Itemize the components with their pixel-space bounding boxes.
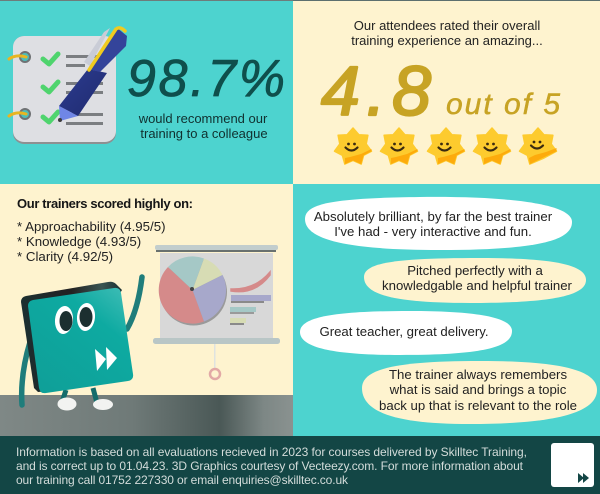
quote bubble 1 <box>305 197 572 250</box>
text: footer note: our training call 01752 227330 or email enquiries@skilltec.co.uk <box>16 473 349 487</box>
quote bubble 1: Absolutely brilliant, by far the best trainer <box>314 209 553 224</box>
panel: testimonials <box>293 184 600 436</box>
panel: trainer scores <box>0 184 293 436</box>
quote bubble 3 <box>300 311 512 355</box>
text: footer note: Information is based on all evaluations recieved in 2023 for courses delivered by Skilltec Training, <box>16 445 527 459</box>
icon: five smiling stars <box>334 128 556 164</box>
text: recommend caption: would recommend our <box>138 111 268 126</box>
quote bubble 1: I've had - very interactive and fun. <box>334 224 532 239</box>
text: out of 5: out of 5 <box>446 88 560 121</box>
logo: Skilltec fast-forward tile <box>551 443 594 487</box>
quote bubble 4 <box>362 361 597 424</box>
quote bubble 3: Great teacher, great delivery. <box>319 324 489 339</box>
panel: recommendation <box>0 0 293 184</box>
illustration: mascot character <box>21 277 142 410</box>
ground <box>0 395 293 436</box>
quote bubble 4: The trainer always remembers <box>389 367 567 382</box>
text: rating intro: Our attendees rated their overall <box>354 18 540 33</box>
stat: 4.8: 4.8 <box>321 52 431 130</box>
text: rating intro: training experience an amazing... <box>351 33 543 48</box>
pie chart <box>159 256 227 326</box>
quote bubble 4: back up that is relevant to the role <box>379 398 577 413</box>
quote bubble 2 <box>364 258 586 303</box>
stat: 98.7%: 98.7% <box>127 50 285 108</box>
text: recommend caption: training to a colleague <box>140 126 268 141</box>
text: score list: * Knowledge (4.93/5) <box>17 234 141 249</box>
footer <box>0 436 600 494</box>
heading: trainers scored: Our trainers scored highly on: <box>17 196 193 211</box>
quote bubble 4: what is said and brings a topic <box>389 382 567 397</box>
illustration: presentation board with pie chart <box>153 245 280 379</box>
panel: overall rating <box>293 0 600 184</box>
quote bubble 2: Pitched perfectly with a <box>407 263 543 278</box>
text: score list: * Approachability (4.95/5) <box>17 219 166 234</box>
quote bubble 2: knowledgable and helpful trainer <box>382 278 573 293</box>
icon: checklist and pen <box>9 27 127 144</box>
text: footer note: and is correct up to 01.04.23. 3D Graphics courtesy of Vecteezy.com. For more information about <box>16 459 524 473</box>
bar and curve legend <box>230 272 271 325</box>
text: score list: * Clarity (4.92/5) <box>17 249 113 264</box>
